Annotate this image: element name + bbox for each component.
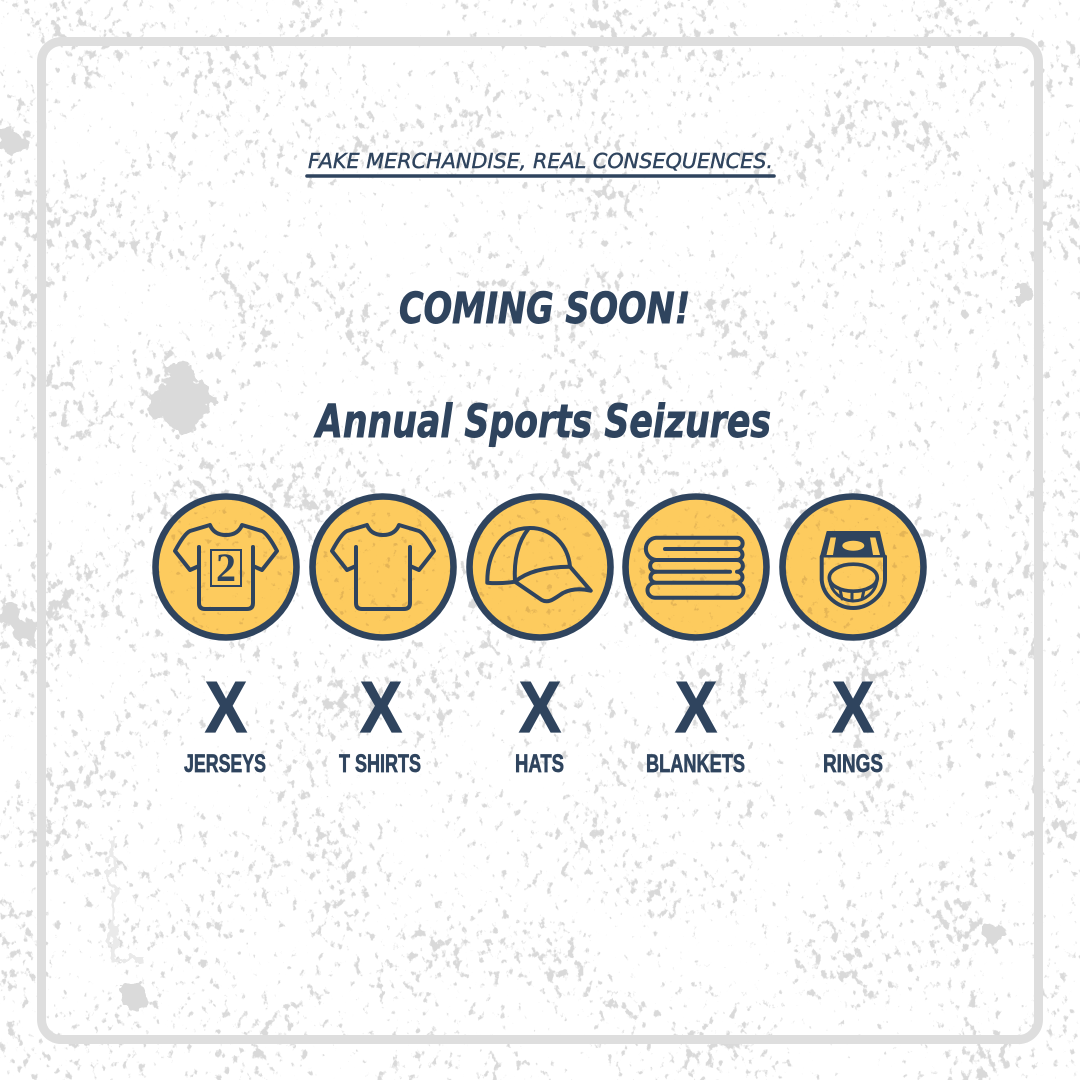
icon: cap [487, 528, 591, 601]
icon row [150, 490, 930, 645]
stat: hats: X [519, 668, 561, 748]
stat: t shirts [339, 668, 421, 778]
heading: coming soon: COMING SOON! [399, 285, 690, 334]
stat: t shirts: T SHIRTS [339, 750, 421, 778]
icon: jersey with number 2: 2 [216, 545, 236, 590]
stat: jerseys: JERSEYS [184, 750, 266, 778]
stat: hats [515, 668, 564, 778]
stat: hats: HATS [515, 750, 564, 778]
stat: t shirts: X [360, 668, 402, 748]
icon: jersey with number 2 [175, 525, 277, 609]
stat: rings: X [832, 668, 874, 748]
icon discs [150, 490, 930, 645]
stat: blankets: X [675, 668, 717, 748]
stat: jerseys: X [205, 668, 247, 748]
stat: rings: RINGS [823, 750, 883, 778]
stat: blankets: BLANKETS [646, 750, 745, 778]
tagline: FAKE MERCHANDISE, REAL CONSEQUENCES. [308, 149, 773, 173]
icon: t-shirt [332, 525, 434, 609]
heading: annual sports seizures: Annual Sports Seizures [314, 395, 771, 448]
stat: blankets [646, 668, 745, 778]
icon: folded blankets [646, 538, 744, 598]
stat: jerseys [184, 668, 266, 778]
stat: rings [823, 668, 883, 778]
icon: championship ring [821, 532, 885, 608]
